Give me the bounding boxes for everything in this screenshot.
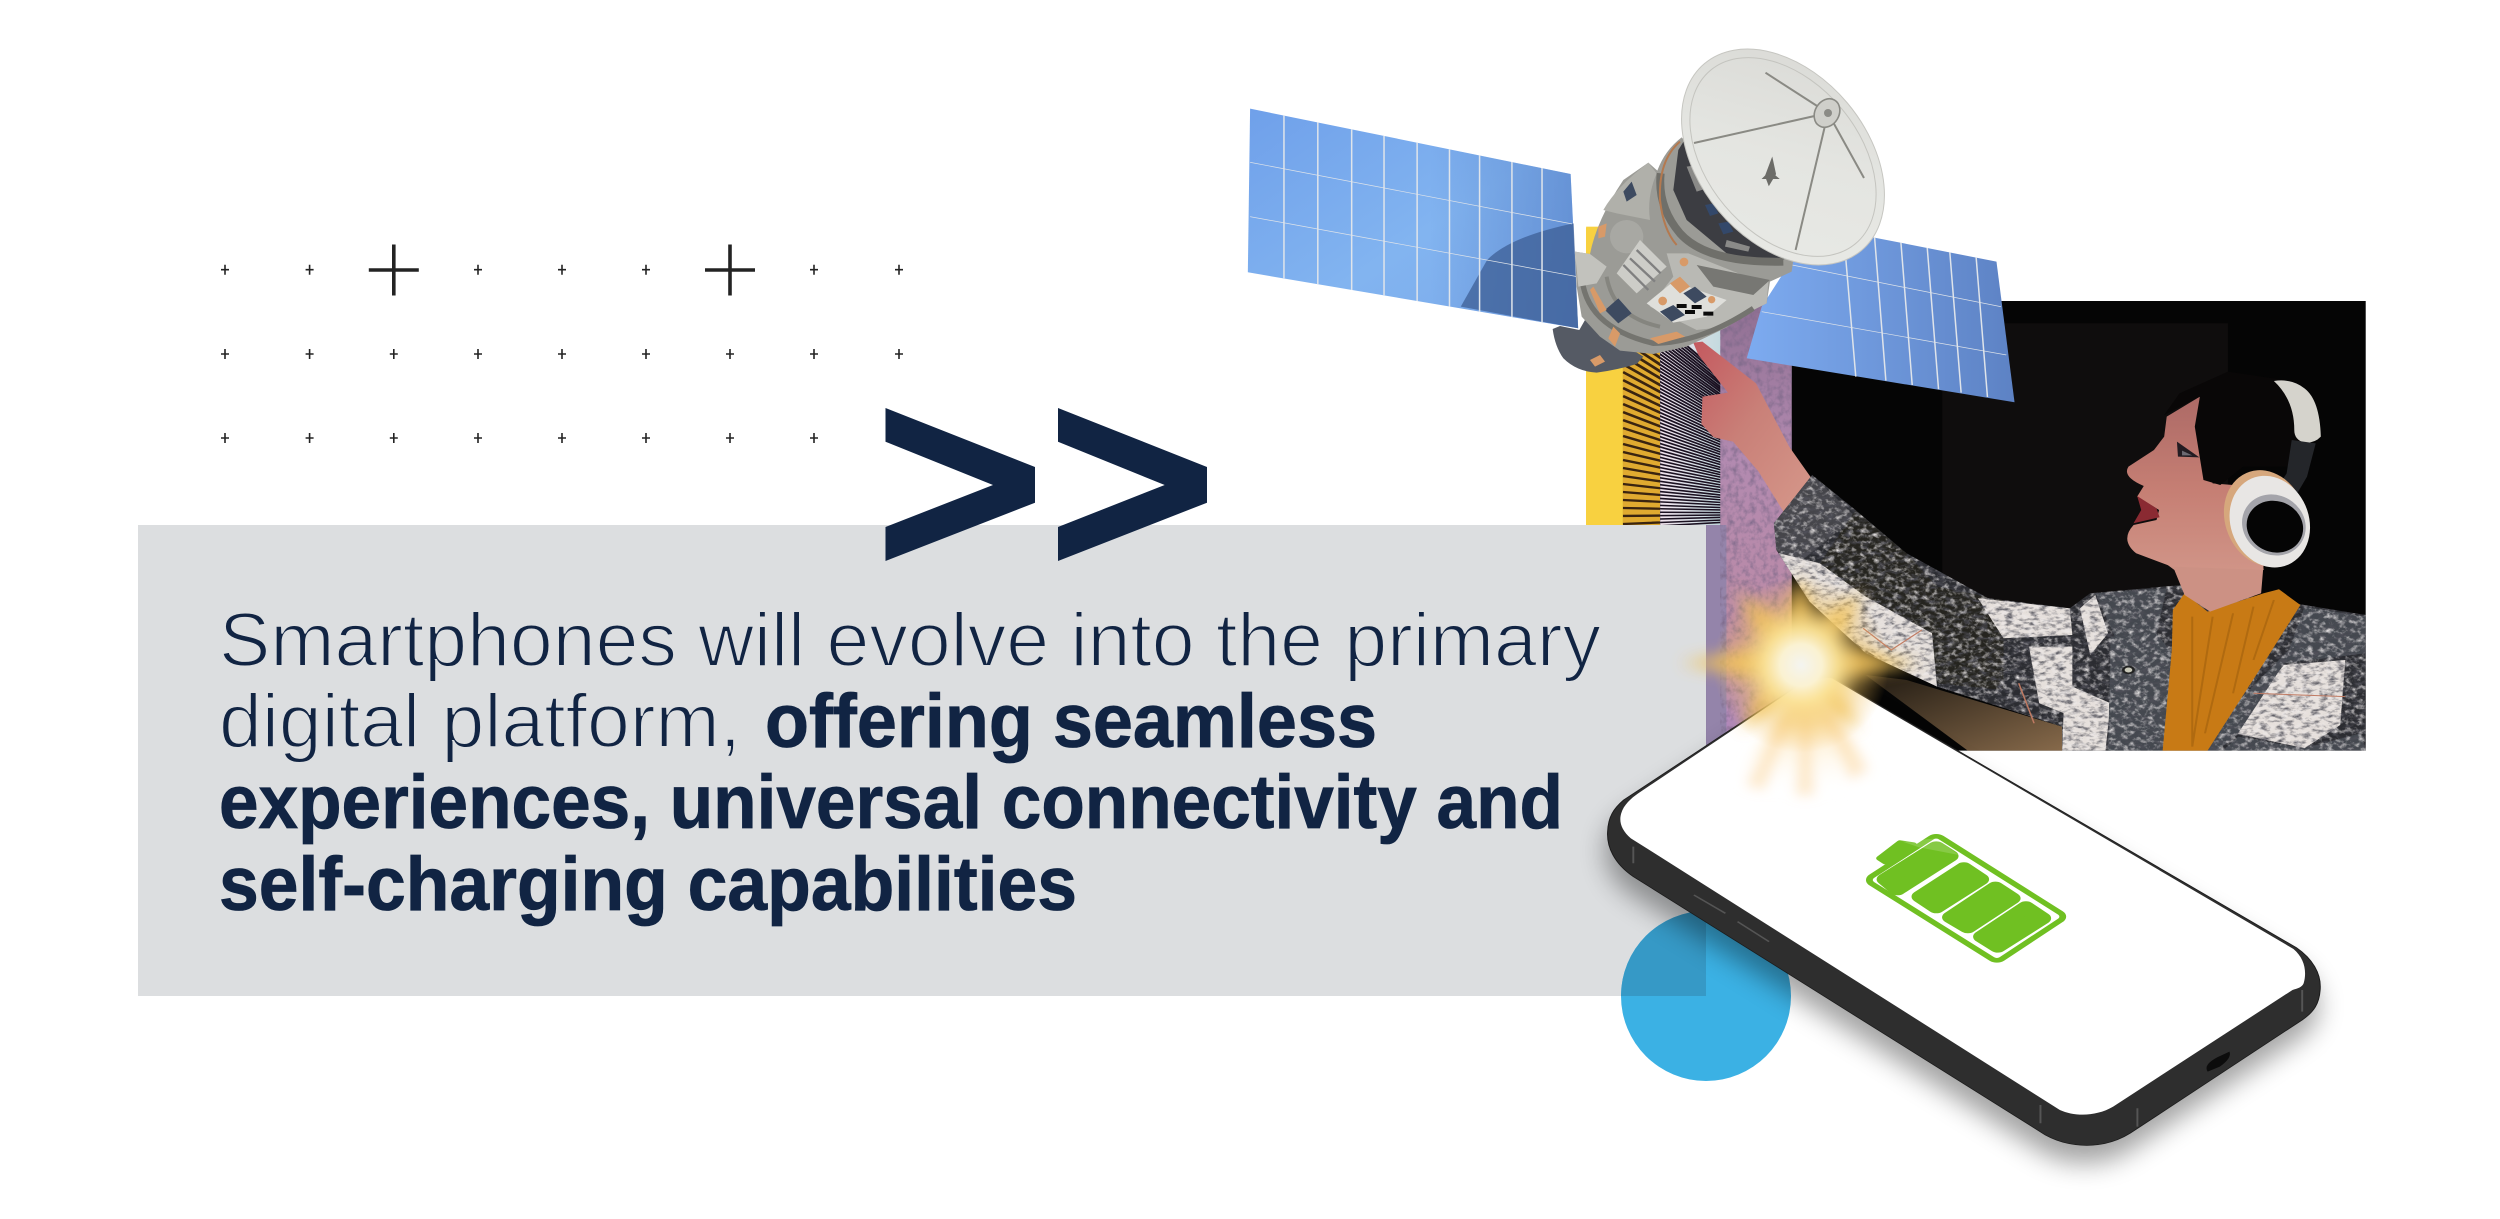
- coat button: [2123, 667, 2134, 673]
- radiator: [1617, 240, 1667, 293]
- screen lower strip: [1706, 525, 1726, 751]
- blue circle: [1621, 911, 1791, 1081]
- mid ring: [1607, 277, 1660, 327]
- headline text: [219, 598, 1601, 927]
- satellite: [1248, 10, 2015, 402]
- lighter wall: [1942, 323, 2228, 657]
- satellite body: [1553, 137, 1793, 373]
- charging port: [2206, 1052, 2230, 1072]
- left solar panel: [1248, 109, 1578, 328]
- rays on phone: [1722, 680, 1895, 795]
- headline text: Smartphones will evolve into the primary: [219, 598, 1601, 683]
- lips: [2134, 496, 2160, 523]
- battery cell 4: [1982, 907, 2042, 947]
- coat stain lines: [1863, 628, 2345, 723]
- orange sweater: [2163, 589, 2300, 751]
- grey text panel: [138, 525, 1706, 996]
- dish hub: [1809, 94, 1845, 132]
- white instrument panel: [1647, 282, 1727, 323]
- ear cup: [2217, 467, 2317, 570]
- burst core: [1713, 577, 1889, 753]
- side seams and buttons: [1633, 847, 2302, 1127]
- dish feed: [1764, 160, 1777, 184]
- burst rays: [1680, 575, 1920, 730]
- battery highlight: [1902, 838, 1959, 855]
- coat light check patches: [1779, 553, 2366, 751]
- hand: [1693, 342, 1820, 517]
- parabolic dish: [1640, 10, 1926, 304]
- upper mechanism: [1610, 220, 1643, 253]
- inner dark section: [1673, 137, 1787, 263]
- double chevron arrows: [886, 408, 1207, 561]
- dark fuzz: [1769, 473, 2371, 753]
- yellow solid strip: [1586, 227, 1623, 525]
- battery cell 3: [1951, 888, 2012, 927]
- light burst: [1680, 575, 1920, 795]
- battery icon: [1877, 838, 2055, 955]
- mottled electronics: [1697, 265, 1770, 295]
- dark room background: [1623, 301, 2366, 751]
- black tiles: [1677, 304, 1713, 316]
- phone: [1608, 677, 2320, 1145]
- side bracket: [1575, 252, 1607, 287]
- hair: [2164, 372, 2304, 485]
- battery inner gap: [1877, 841, 2055, 955]
- phone screen: [1620, 678, 2305, 1115]
- dish struts: [1694, 73, 1864, 250]
- light fuzz: [1769, 473, 2371, 753]
- battery cap: [1880, 843, 1913, 862]
- right solar panel: [1747, 237, 2015, 402]
- solar panels: [1248, 109, 2015, 402]
- face: [2127, 397, 2264, 570]
- lower ring: [1582, 273, 1753, 343]
- headphone band: [2274, 380, 2321, 443]
- battery outline: [1877, 841, 2055, 955]
- inner tiles: [1705, 203, 1733, 234]
- rear module: [1553, 320, 1643, 373]
- moire white band: [1660, 330, 1720, 525]
- blue tiles: [1605, 182, 1707, 323]
- moire yellow band: [1622, 352, 1660, 525]
- main drum: [1575, 137, 1793, 354]
- battery cell 2: [1920, 868, 1980, 907]
- dish support ring: [1660, 173, 1783, 262]
- headline text: self-charging capabilities: [219, 842, 1077, 927]
- headline text: offering seamless: [765, 679, 1377, 764]
- yellow block: [1586, 228, 1646, 528]
- neck: [2157, 557, 2264, 612]
- plus sign grid: [221, 244, 903, 443]
- phone shadow: [1606, 695, 2318, 1163]
- phone body: [1608, 677, 2320, 1145]
- headphone slider: [2274, 440, 2316, 498]
- headline text: digital platform,: [219, 679, 741, 764]
- coat: [1769, 473, 2371, 753]
- photo: woman pointing at screen: [1586, 227, 2371, 753]
- outer barrel plate: [1603, 163, 1657, 220]
- battery cell 1: [1885, 847, 1950, 889]
- sleeve dark band: [1820, 510, 2003, 690]
- screen texture: [1720, 301, 1792, 751]
- headline text: experiences, universal connectivity and: [219, 760, 1563, 845]
- light shell: [1650, 253, 1768, 330]
- cuff: [1774, 475, 1852, 559]
- brown glow wedge: [1866, 675, 2062, 751]
- copper tiles: [1590, 223, 1690, 367]
- purple screen: [1720, 301, 1792, 751]
- copper strap: [1660, 142, 1680, 245]
- eye: [2177, 442, 2199, 457]
- coat grey lapels: [2095, 588, 2366, 751]
